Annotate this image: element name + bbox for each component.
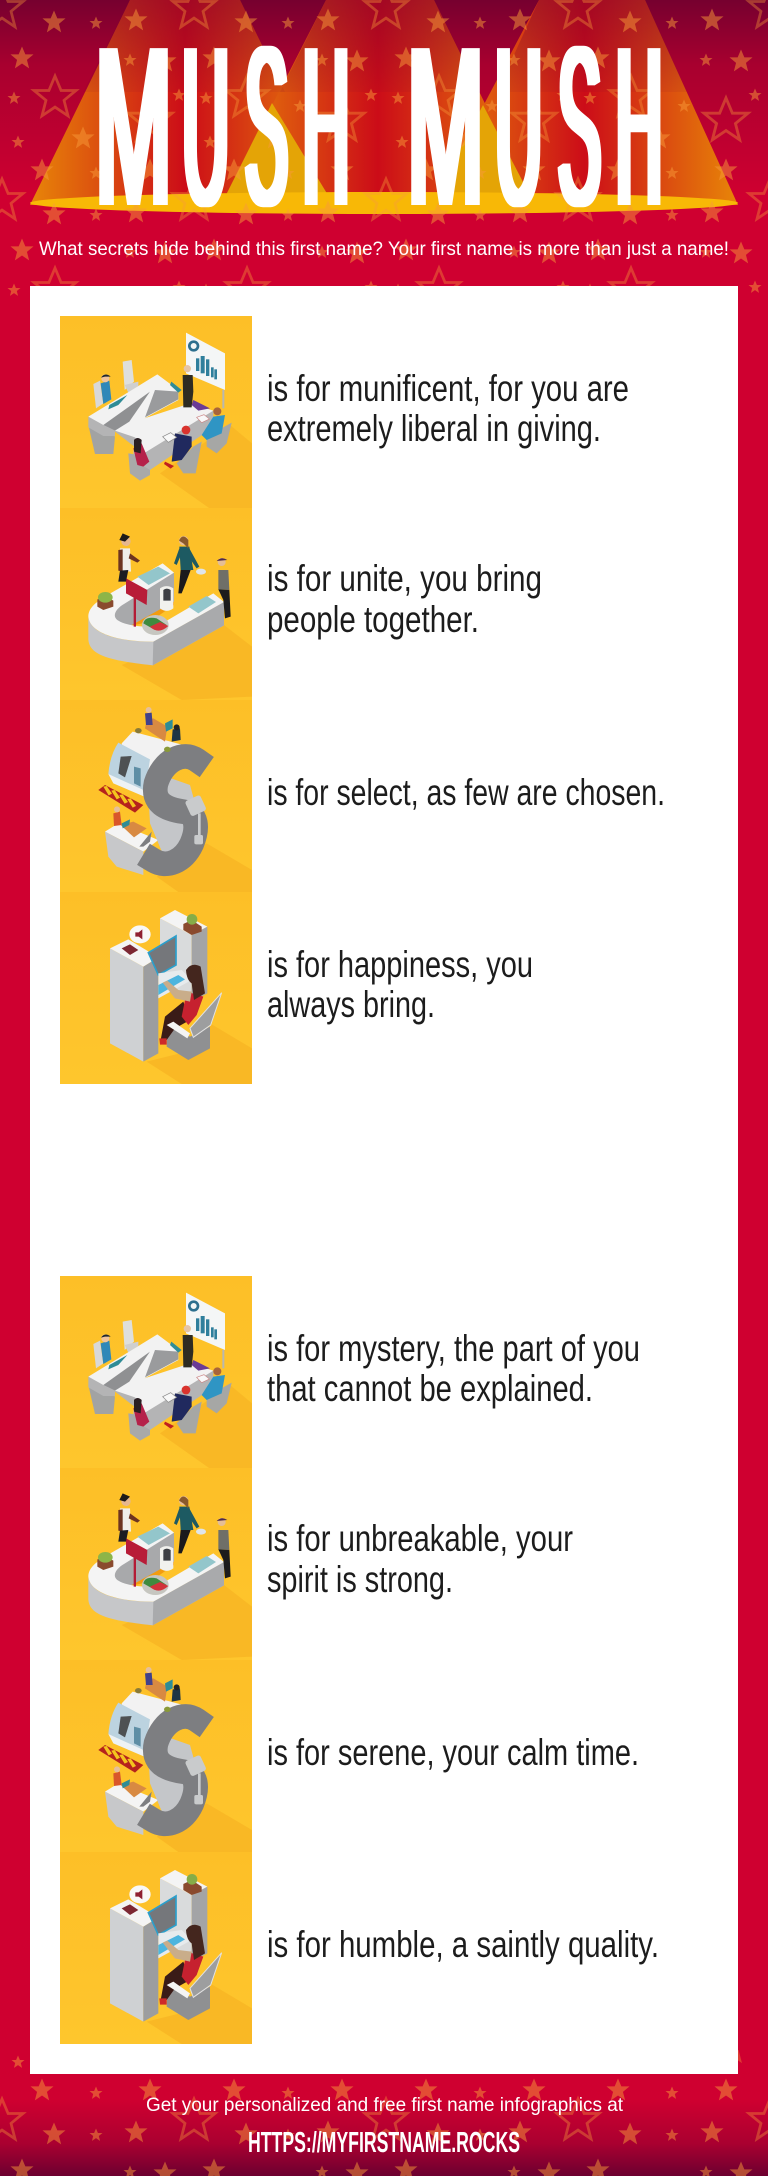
text: second M: that cannot be explained.	[267, 1368, 593, 1409]
icon: isometric letter S building, second name	[60, 1660, 252, 1852]
text: M line one	[267, 368, 629, 449]
footer url: HTTPS://MYFIRSTNAME.ROCKS	[248, 2127, 520, 2159]
text: second M: is for mystery, the part of you	[267, 1328, 640, 1369]
spotlights	[30, 0, 738, 214]
text: U line one	[267, 558, 542, 640]
star pattern: top	[0, 0, 768, 300]
text: M line one: is for munificent, for you are	[267, 368, 629, 409]
text: U line one: people together.	[267, 599, 479, 640]
title	[95, 0, 662, 254]
panel: white content area	[30, 286, 738, 2074]
footer text: Get your personalized and free first name infographics at	[146, 2094, 624, 2116]
star pattern: bottom	[0, 2050, 768, 2176]
icon: isometric letter M office	[60, 316, 252, 509]
text: U line one: is for unite, you bring	[267, 558, 542, 599]
text: second S: is for serene, your calm time.	[267, 1732, 639, 1773]
icon: isometric letter M office, second name	[60, 1276, 252, 1469]
icon: isometric letter S building	[60, 700, 252, 892]
text: H line one	[267, 944, 533, 1025]
text: second H: is for humble, a saintly quality.	[267, 1924, 659, 1965]
text: H line one: always bring.	[267, 984, 435, 1025]
text: H line one: is for happiness, you	[267, 944, 533, 985]
title: USH	[496, 0, 662, 254]
text: second M	[267, 1328, 640, 1409]
icon: isometric letter H desk, second name	[60, 1852, 252, 2044]
text: second U	[267, 1518, 573, 1600]
icon: isometric letter U restaurant, second name	[60, 1468, 252, 1660]
subtitle: What secrets hide behind this first name? Your first name is more than just a name!	[39, 238, 729, 260]
title: M	[407, 0, 484, 253]
text: second U: spirit is strong.	[267, 1559, 453, 1600]
text: second U: is for unbreakable, your	[267, 1518, 573, 1559]
text: M line one: extremely liberal in giving.	[267, 408, 601, 449]
title: M	[95, 0, 172, 253]
icon: isometric letter U restaurant	[60, 508, 252, 700]
title: USH	[183, 0, 349, 254]
icon: isometric letter H desk	[60, 892, 252, 1084]
